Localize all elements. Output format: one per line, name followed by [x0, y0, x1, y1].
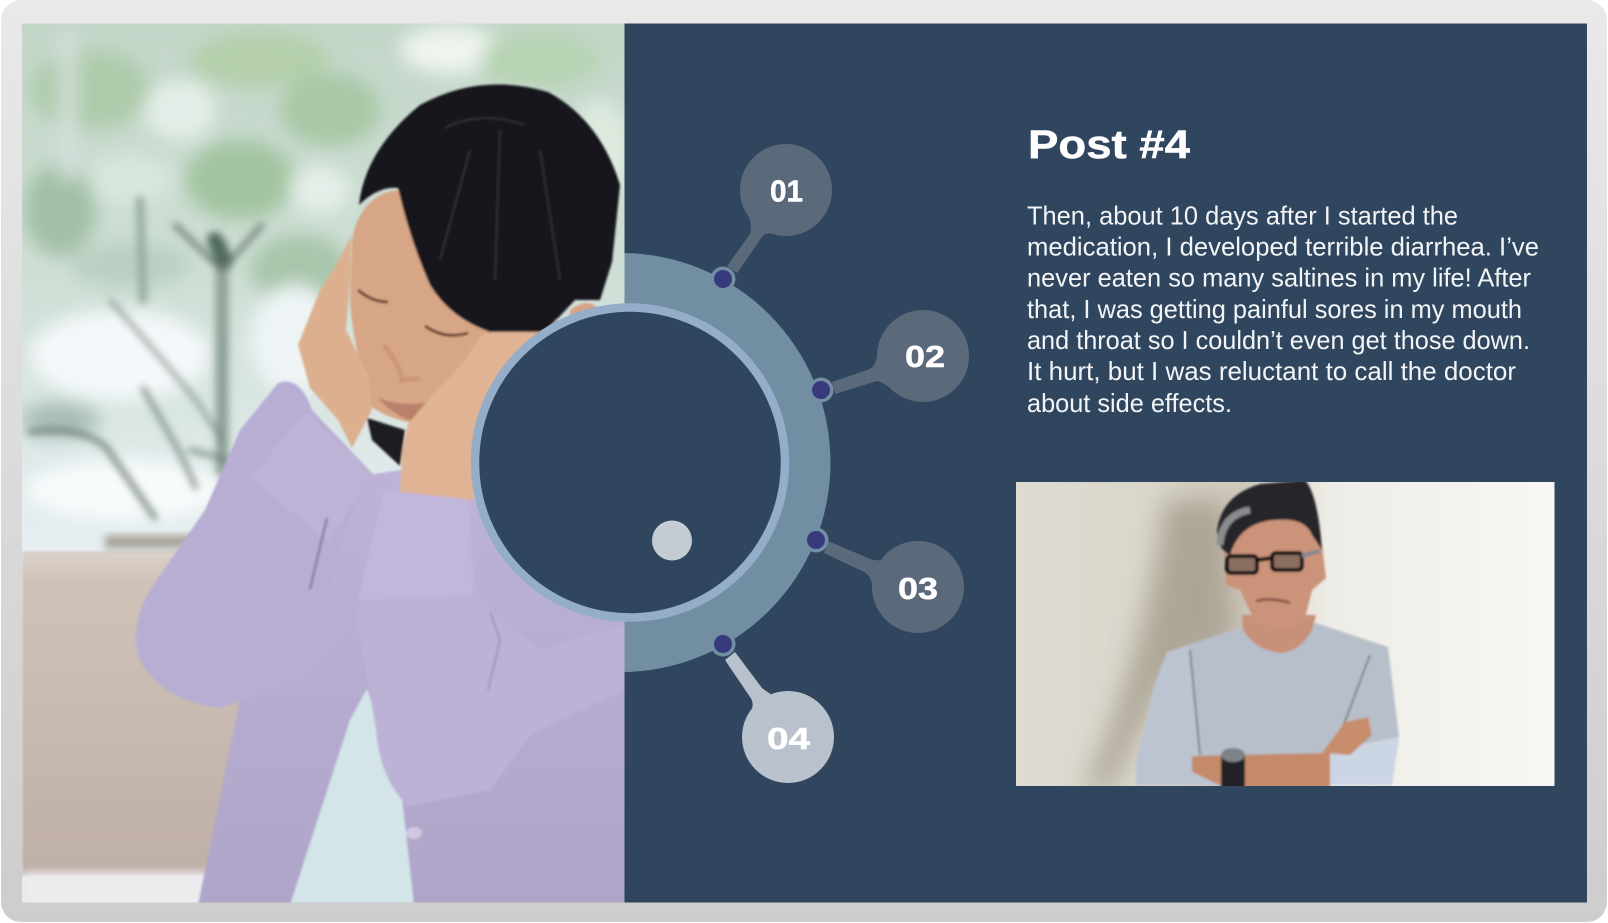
- undershirt: [290, 689, 414, 905]
- body text: Then, about 10 days after I started the: [1027, 200, 1458, 230]
- step 01: [710, 144, 832, 292]
- step 03: [804, 528, 964, 633]
- connector diagram: [470, 144, 969, 783]
- cardigan body: [198, 470, 630, 905]
- button: [406, 827, 422, 839]
- hair: [1217, 480, 1322, 555]
- left cuff: [250, 412, 373, 541]
- right cuff: [358, 491, 473, 600]
- center dot: [652, 520, 692, 560]
- hair: [359, 84, 620, 332]
- photo: man with crossed arms: [1016, 480, 1555, 790]
- step 01: 01: [770, 174, 803, 208]
- right arm: [371, 703, 525, 804]
- step 02: [808, 310, 969, 402]
- outer half ring: [624, 253, 830, 672]
- mouth: [1256, 599, 1290, 603]
- hands and forearms: [1322, 717, 1372, 755]
- panel: navy content background: [624, 24, 1587, 902]
- body text: that, I was getting painful sores in my mouth: [1027, 294, 1522, 324]
- step 03: 03: [898, 571, 938, 606]
- neck: [1242, 615, 1316, 653]
- ear: [568, 300, 598, 316]
- watch: [1221, 755, 1245, 788]
- sofa: [22, 550, 240, 876]
- near hand: [400, 318, 560, 500]
- neck shadow: [367, 418, 405, 466]
- shirt: [1184, 622, 1400, 756]
- inner circle: [475, 308, 785, 618]
- face: [348, 188, 492, 424]
- glasses: [1227, 553, 1302, 573]
- body text: about side effects.: [1027, 388, 1232, 418]
- step 04: 04: [767, 721, 811, 756]
- body text: never eaten so many saltines in my life! After: [1027, 263, 1531, 293]
- far hand: [298, 236, 372, 448]
- body text: medication, I developed terrible diarrhea. I’ve: [1027, 232, 1539, 262]
- title: Post #4: [1028, 123, 1191, 167]
- body text: It hurt, but I was reluctant to call the doctor: [1027, 356, 1516, 386]
- photo: woman holding her head: [20, 23, 630, 912]
- step 02: 02: [905, 339, 945, 374]
- step 04: [710, 632, 834, 783]
- body text: [1027, 200, 1539, 418]
- body text: and throat so I couldn’t even get those down.: [1027, 325, 1530, 355]
- face: [1223, 518, 1328, 616]
- left arm: [136, 382, 373, 708]
